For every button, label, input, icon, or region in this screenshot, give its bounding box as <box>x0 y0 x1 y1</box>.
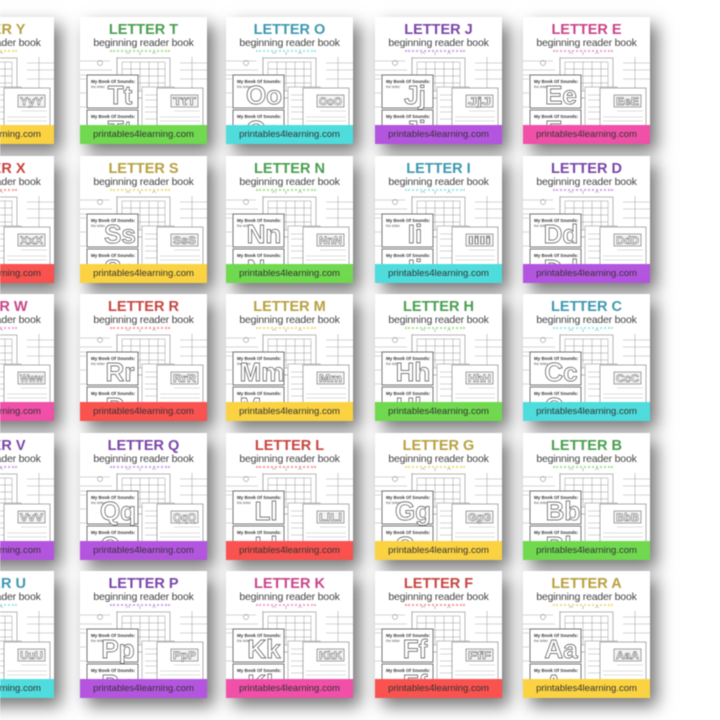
card: letter I: My Book Of Sounds: <box>386 218 431 223</box>
card: letter N: My Book Of Sounds: <box>237 253 282 258</box>
card: letter V <box>0 433 54 560</box>
card: letter A: My Book Of Sounds: <box>534 633 579 638</box>
card: letter T: printables4learning.com <box>93 129 194 140</box>
card: letter G: printables4learning.com <box>388 545 489 556</box>
card: letter A: LETTER A <box>551 576 622 592</box>
card: letter T: Tt <box>108 80 133 110</box>
card: letter W: Www <box>20 373 43 385</box>
card: letter T: LETTER T <box>109 22 178 38</box>
card: letter K: My Book Of Sounds: <box>237 668 282 673</box>
card: letter T <box>80 17 207 144</box>
card: letter F: Ff <box>403 634 428 664</box>
card: letter J: My Book Of Sounds: <box>386 79 431 84</box>
card: letter I: the letter <box>386 224 401 228</box>
card: letter G: the letter <box>386 501 401 505</box>
card: letter I: My Book Of Sounds: <box>386 253 431 258</box>
card: letter T: beginning reader book <box>93 37 194 49</box>
card: letter C: My Book Of Sounds: <box>534 391 579 396</box>
card: letter V: VvV <box>20 512 44 524</box>
card: letter O: beginning reader book <box>239 37 340 49</box>
card: letter H <box>375 294 502 421</box>
card: letter N: printables4learning.com <box>239 268 340 279</box>
card: letter P: beginning reader book <box>93 591 194 603</box>
card: letter A: Aa <box>544 634 578 664</box>
card: letter R: My Book Of Sounds: <box>91 356 136 361</box>
card: letter F: printables4learning.com <box>388 683 489 694</box>
card: letter E: the letter <box>534 85 549 89</box>
card: letter B: BbB <box>616 512 639 524</box>
card: letter D: My Book Of Sounds: <box>534 253 579 258</box>
card: letter E: printables4learning.com <box>536 129 637 140</box>
card: letter J: the letter <box>386 85 401 89</box>
card: letter R: printables4learning.com <box>93 406 194 417</box>
card: letter F: beginning reader book <box>388 591 489 603</box>
card: letter J: Jj <box>404 80 426 110</box>
card: letter P: PpP <box>173 650 196 662</box>
card: letter S: My Book Of Sounds: <box>91 253 136 258</box>
card: letter R: LETTER R <box>108 299 179 315</box>
card: letter Q: beginning reader book <box>93 453 194 465</box>
card: letter T: TtT <box>173 96 196 108</box>
card: letter L: the letter <box>237 501 252 505</box>
card: letter K <box>226 571 353 698</box>
card: letter C: CcC <box>616 373 639 385</box>
card: letter Q: the letter <box>91 501 106 505</box>
card: letter L: LETTER L <box>255 438 324 454</box>
card: letter J: LETTER J <box>404 22 473 38</box>
card: letter G: My Book Of Sounds: <box>386 530 431 535</box>
card: letter I: printables4learning.com <box>388 268 489 279</box>
card: letter O: Oo <box>246 80 282 110</box>
card: letter R: beginning reader book <box>93 314 194 326</box>
card: letter P: LETTER P <box>108 576 179 592</box>
card: letter B: the letter <box>534 501 549 505</box>
card: letter K: Kk <box>247 634 281 664</box>
card: letter O: My Book Of Sounds: <box>237 79 282 84</box>
card: letter Q: LETTER Q <box>108 438 179 454</box>
card: letter I: beginning reader book <box>388 176 489 188</box>
card: letter K: LETTER K <box>254 576 325 592</box>
card: letter N: NnN <box>319 235 342 247</box>
card: letter R: the letter <box>91 362 106 366</box>
card: letter X: XxX <box>20 235 44 247</box>
card: letter M: My Book Of Sounds: <box>237 356 282 361</box>
card: letter E: EeE <box>616 96 639 108</box>
card: letter K: beginning reader book <box>239 591 340 603</box>
card: letter A: My Book Of Sounds: <box>534 668 579 673</box>
card: letter J: printables4learning.com <box>388 129 489 140</box>
card: letter P: the letter <box>91 639 106 643</box>
card: letter U <box>0 571 54 698</box>
card: letter K: printables4learning.com <box>239 683 340 694</box>
card: letter G: LETTER G <box>403 438 474 454</box>
card: letter E <box>523 17 650 144</box>
card: letter O: OoO <box>319 96 342 108</box>
card: letter D: LETTER D <box>551 161 622 177</box>
card: letter G: beginning reader book <box>388 453 489 465</box>
card: letter M: My Book Of Sounds: <box>237 391 282 396</box>
card: letter H: the letter <box>386 362 401 366</box>
card: letter T: My Book Of Sounds: <box>91 79 136 84</box>
card: letter H: LETTER H <box>403 299 474 315</box>
card: letter F: My Book Of Sounds: <box>386 668 431 673</box>
card: letter M: Mm <box>240 357 284 387</box>
card: letter L: Ll <box>254 496 278 526</box>
card: letter Q: My Book Of Sounds: <box>91 495 136 500</box>
card: letter M: beginning reader book <box>239 314 340 326</box>
card: letter K: My Book Of Sounds: <box>237 633 282 638</box>
card: letter N: beginning reader book <box>239 176 340 188</box>
card: letter H: printables4learning.com <box>388 406 489 417</box>
card: letter P: My Book Of Sounds: <box>91 633 136 638</box>
card: letter A: printables4learning.com <box>536 683 637 694</box>
card: letter A: AaA <box>616 650 639 662</box>
card: letter S <box>80 156 207 283</box>
card: letter H: Hh <box>396 357 430 387</box>
card: letter A: beginning reader book <box>536 591 637 603</box>
card: letter O: printables4learning.com <box>239 129 340 140</box>
card: letter C: LETTER C <box>551 299 622 315</box>
card: letter L <box>226 433 353 560</box>
card: letter J: My Book Of Sounds: <box>386 114 431 119</box>
card: letter D: Dd <box>544 219 578 249</box>
card: letter P: printables4learning.com <box>93 683 194 694</box>
card: letter Y: YyY <box>20 96 44 108</box>
card: letter G: GgG <box>468 512 491 524</box>
card: letter C: Cc <box>544 357 578 387</box>
card: letter C <box>523 294 650 421</box>
card: letter E: LETTER E <box>551 22 622 38</box>
card: letter P: Pp <box>101 634 135 664</box>
card: letter R <box>80 294 207 421</box>
card: letter Q: Qq <box>100 496 136 526</box>
card: letter J: beginning reader book <box>388 37 489 49</box>
card: letter S: Ss <box>104 219 136 249</box>
card: letter K: the letter <box>237 639 252 643</box>
card: letter N: My Book Of Sounds: <box>237 218 282 223</box>
card: letter S: the letter <box>91 224 106 228</box>
card: letter U: UuU <box>20 650 43 662</box>
card: letter O <box>226 17 353 144</box>
card: letter S: My Book Of Sounds: <box>91 218 136 223</box>
card: letter B: My Book Of Sounds: <box>534 530 579 535</box>
card: letter D: the letter <box>534 224 549 228</box>
card: letter X <box>0 156 54 283</box>
card: letter J: JjJ <box>468 96 491 108</box>
card: letter F <box>375 571 502 698</box>
card: letter L: LlLl <box>319 512 342 524</box>
card: letter A <box>523 571 650 698</box>
card: letter Q: QqQ <box>173 512 196 524</box>
card: letter M: the letter <box>237 362 252 366</box>
card: letter R: RrR <box>173 373 196 385</box>
card: letter Q: printables4learning.com <box>93 545 194 556</box>
card: letter E: beginning reader book <box>536 37 637 49</box>
card: letter D: beginning reader book <box>536 176 637 188</box>
card: letter D: printables4learning.com <box>536 268 637 279</box>
card: letter T: My Book Of Sounds: <box>91 114 136 119</box>
card: letter D: My Book Of Sounds: <box>534 218 579 223</box>
card: letter S: SsS <box>173 235 196 247</box>
card: letter M: Mm <box>319 373 342 385</box>
card: letter O: LETTER O <box>254 22 325 38</box>
card: letter K: KkK <box>319 650 342 662</box>
card: letter Y <box>0 17 54 144</box>
card: letter H: My Book Of Sounds: <box>386 391 431 396</box>
card: letter W <box>0 294 54 421</box>
card: letter E: Ee <box>545 80 577 110</box>
card: letter F: the letter <box>386 639 401 643</box>
card: letter I: Ii <box>408 219 422 249</box>
card: letter O: the letter <box>237 85 252 89</box>
card: letter S: LETTER S <box>108 161 179 177</box>
card: letter D: DdD <box>616 235 639 247</box>
card: letter L: My Book Of Sounds: <box>237 495 282 500</box>
card: letter I: IiIi <box>468 235 491 247</box>
card: letter C: beginning reader book <box>536 314 637 326</box>
card: letter N <box>226 156 353 283</box>
card: letter R: My Book Of Sounds: <box>91 391 136 396</box>
card: letter G: Gg <box>395 496 431 526</box>
card: letter N: Nn <box>247 219 281 249</box>
card: letter G <box>375 433 502 560</box>
card: letter M: LETTER M <box>253 299 326 315</box>
card: letter I: LETTER I <box>406 161 471 177</box>
card: letter G: My Book Of Sounds: <box>386 495 431 500</box>
card: letter L: My Book Of Sounds: <box>237 530 282 535</box>
card: letter B: My Book Of Sounds: <box>534 495 579 500</box>
card: letter H: beginning reader book <box>388 314 489 326</box>
card: letter S: printables4learning.com <box>93 268 194 279</box>
card: letter N: the letter <box>237 224 252 228</box>
card: letter R: Rr <box>106 357 134 387</box>
card: letter B: printables4learning.com <box>536 545 637 556</box>
card: letter L: printables4learning.com <box>239 545 340 556</box>
card: letter P <box>80 571 207 698</box>
card: letter Q <box>80 433 207 560</box>
card: letter H: HhH <box>468 373 491 385</box>
card: letter M: printables4learning.com <box>239 406 340 417</box>
card: letter F: FfF <box>468 650 491 662</box>
card: letter C: printables4learning.com <box>536 406 637 417</box>
card: letter F: LETTER F <box>404 576 473 592</box>
card: letter T: the letter <box>91 85 106 89</box>
card: letter A: the letter <box>534 639 549 643</box>
card: letter B: Bb <box>546 496 580 526</box>
card: letter L: beginning reader book <box>239 453 340 465</box>
card: letter J <box>375 17 502 144</box>
card: letter D <box>523 156 650 283</box>
card: letter O: My Book Of Sounds: <box>237 114 282 119</box>
card: letter H: My Book Of Sounds: <box>386 356 431 361</box>
card: letter I <box>375 156 502 283</box>
card: letter B: beginning reader book <box>536 453 637 465</box>
card: letter P: My Book Of Sounds: <box>91 668 136 673</box>
card: letter C: the letter <box>534 362 549 366</box>
card: letter S: beginning reader book <box>93 176 194 188</box>
card: letter F: My Book Of Sounds: <box>386 633 431 638</box>
card: letter C: My Book Of Sounds: <box>534 356 579 361</box>
card: letter M <box>226 294 353 421</box>
card: letter N: LETTER N <box>254 161 325 177</box>
card: letter B <box>523 433 650 560</box>
card: letter Q: My Book Of Sounds: <box>91 530 136 535</box>
card: letter E: My Book Of Sounds: <box>534 79 579 84</box>
card: letter B: LETTER B <box>551 438 622 454</box>
card: letter E: My Book Of Sounds: <box>534 114 579 119</box>
